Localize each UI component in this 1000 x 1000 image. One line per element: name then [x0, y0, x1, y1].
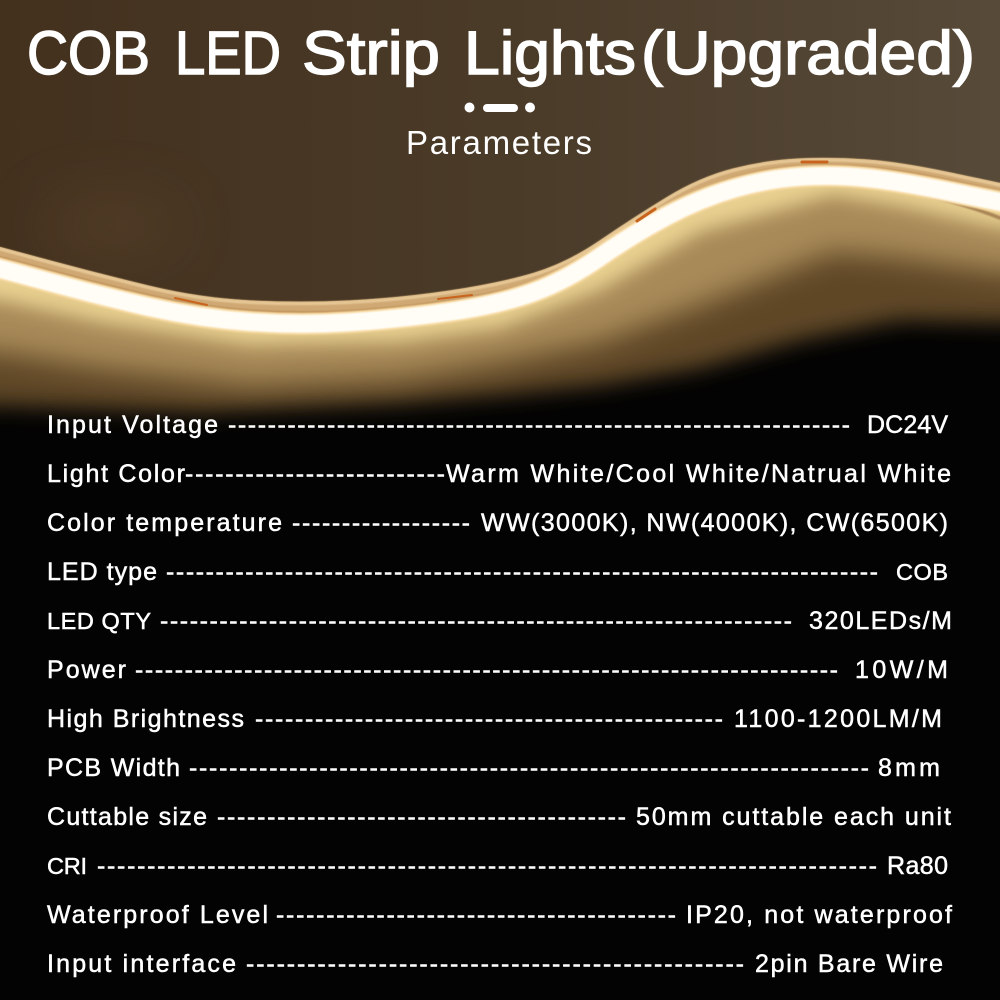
row: LED quantity: [47, 607, 952, 635]
title: Lights: [464, 19, 636, 87]
strip white light band: [0, 176, 1000, 324]
row: LED quantity: LED QTY: [47, 608, 151, 634]
strip pale upper rim: [0, 160, 1000, 304]
row: cuttable size: 50mm cuttable each unit: [636, 803, 951, 831]
inner glow: [0, 100, 1000, 345]
title: (Upgraded): [641, 19, 975, 87]
outer glow: [0, 100, 1000, 412]
row: light color: --------------------------: [185, 460, 445, 488]
row: input interface: 2pin Bare Wire: [755, 950, 943, 978]
row: input voltage: [47, 411, 948, 439]
row: waterproof level: IP20, not waterproof: [686, 901, 952, 929]
title: Strip: [302, 19, 440, 87]
row: light color: Light Color: [47, 460, 185, 488]
row: color temperature: WW(3000K), NW(4000K), CW(6500K): [481, 509, 948, 537]
parameters list: [47, 411, 952, 978]
row: input voltage: DC24V: [867, 411, 948, 439]
row: input interface: -------------------------------------------------: [246, 950, 744, 978]
row: input interface: Input interface: [47, 950, 236, 978]
row: power: 10W/M: [855, 656, 948, 684]
row: light color: [47, 460, 951, 488]
row: color temperature: ------------------: [292, 509, 470, 537]
row: LED quantity: 320LEDs/M: [809, 607, 952, 635]
subtitle: Parameters: [406, 124, 592, 161]
row: high brightness: High Brightness: [47, 705, 244, 733]
row: waterproof level: Waterproof Level: [47, 901, 268, 929]
row: cuttable size: [47, 803, 951, 831]
middle glow: [0, 100, 1000, 385]
row: light color: Warm White/Cool White/Natrual White: [446, 460, 951, 488]
row: high brightness: [47, 705, 942, 733]
title: COB: [27, 19, 150, 87]
row: input voltage: ---------------------------------------------------------------: [228, 411, 850, 439]
warm patch on wall: [40, 200, 180, 250]
row: LED type: COB: [896, 559, 948, 585]
row: power: -----------------------------------------------------------------------: [135, 656, 838, 684]
row: CRI: ------------------------------------------------------------------------------: [97, 852, 877, 880]
row: cuttable size: -----------------------------------------: [217, 803, 626, 831]
wall backdrop: [0, 0, 1000, 302]
row: high brightness: 1100-1200LM/M: [734, 705, 942, 733]
row: high brightness: -----------------------------------------------: [255, 705, 723, 733]
row: PCB width: 8mm: [878, 754, 940, 782]
strip silicone body: [0, 158, 1000, 324]
row: waterproof level: ----------------------------------------: [276, 901, 676, 929]
row: color temperature: Color temperature: [47, 509, 282, 537]
row: cuttable size: Cuttable size: [47, 803, 207, 831]
row: input voltage: Input Voltage: [47, 411, 218, 439]
decorative dot and pill divider: [464, 102, 535, 112]
row: CRI: CRI: [47, 853, 87, 879]
row: LED quantity: ----------------------------------------------------------------: [160, 607, 792, 635]
row: color temperature: [47, 509, 948, 537]
strip lower edge at right: [920, 194, 1000, 236]
strip copper inner line: [0, 165, 1000, 312]
row: waterproof level: [47, 901, 952, 929]
photo: glowing COB LED strip: [0, 0, 1000, 412]
strip copper markings: [175, 162, 827, 305]
row: LED type: ------------------------------------------------------------------------: [166, 558, 878, 586]
row: PCB width: --------------------------------------------------------------------: [189, 754, 869, 782]
row: input interface: [47, 950, 943, 978]
title: LED: [175, 19, 281, 87]
row: power: Power: [47, 656, 126, 684]
title: [27, 19, 975, 87]
row: LED type: LED type: [47, 558, 157, 586]
strip light halo: [0, 176, 1000, 324]
row: CRI: Ra80: [887, 852, 948, 880]
row: PCB width: PCB Width: [47, 754, 180, 782]
